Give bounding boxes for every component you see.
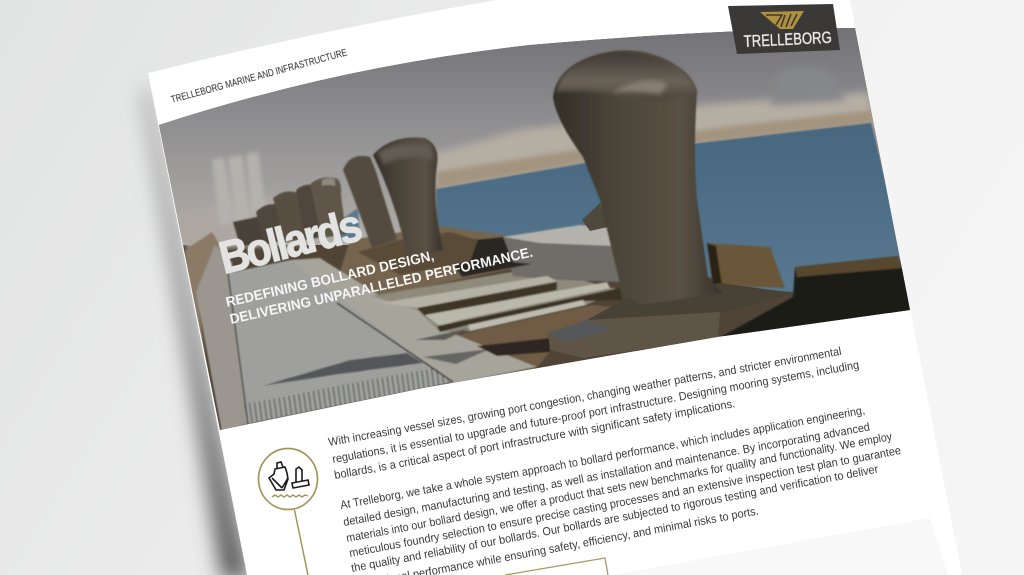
grated deck bbox=[228, 259, 432, 404]
right foreground block bbox=[720, 258, 910, 336]
bollard A bbox=[373, 137, 443, 258]
brochure page bbox=[148, 0, 962, 575]
bollard A base bbox=[358, 232, 478, 275]
body text: meticulous foundry selection to ensure precise casting processes and an extensive inspection test plan to guarantee bbox=[348, 444, 902, 560]
deck shadows bbox=[262, 353, 423, 386]
body text: the quality and reliability of our bollards. Our bollards are subjected to rigorous testing and verification to deliver bbox=[350, 463, 879, 575]
callout box bbox=[505, 558, 608, 575]
deck left rail bbox=[185, 232, 220, 432]
timber deck under steps bbox=[458, 304, 611, 367]
body text: detailed design, manufacturing and testing, as well as installation and maintenance. By incorporating advanced bbox=[342, 421, 871, 529]
body text: At Trelleborg, we take a whole system approach to bollard performance, which includes application engineering, bbox=[339, 404, 866, 512]
concrete strip bbox=[196, 245, 250, 432]
large bollard spur bbox=[582, 203, 608, 231]
subtitle: REDEFINING BOLLARD DESIGN, bbox=[224, 247, 435, 310]
shore bank bbox=[437, 110, 875, 188]
large bollard bbox=[553, 50, 722, 305]
logo badge bbox=[728, 4, 840, 54]
dark recess bbox=[450, 237, 532, 277]
logo wordmark: TRELLEBORG bbox=[743, 28, 832, 51]
sky bbox=[150, 20, 920, 245]
photo base bbox=[150, 20, 920, 440]
distant city bbox=[770, 66, 846, 105]
distant bollards bbox=[233, 177, 346, 246]
walkway joint bbox=[337, 303, 453, 382]
concrete block bbox=[503, 238, 623, 282]
title: Bollards bbox=[214, 199, 366, 284]
body text: regulations, it is essential to upgrade and future-proof port infrastructure. Designing mooring systems, including bbox=[331, 358, 860, 466]
body text: With increasing vessel sizes, growing port congestion, changing weather patterns, and stricter environmental bbox=[327, 345, 842, 449]
body text: materials into our bollard design, we offer a product that sets new benchmarks for quality and functionality. We employ bbox=[345, 430, 893, 545]
icon: ships in roundel bbox=[258, 448, 318, 575]
far shore bbox=[430, 92, 875, 188]
subtitle: DELIVERING UNPARALLELED PERFORMANCE. bbox=[228, 244, 534, 327]
logo emblem bbox=[760, 11, 804, 29]
page shadow bbox=[142, 85, 250, 575]
hero photo bbox=[150, 20, 920, 440]
water bbox=[436, 123, 915, 300]
timber block bbox=[707, 243, 785, 288]
side panel bbox=[612, 518, 948, 575]
hazy left towers bbox=[177, 152, 300, 251]
concrete plate under steps bbox=[372, 268, 620, 332]
timber far deck bbox=[340, 226, 530, 296]
body text bbox=[327, 345, 902, 575]
concrete walkway bbox=[290, 258, 537, 384]
step plates bbox=[380, 276, 557, 308]
large bollard base bbox=[587, 283, 793, 320]
body text: bollards, is a critical aspect of port infrastructure with significant safety implications. bbox=[333, 397, 736, 482]
header label: TRELLEBORG MARINE AND INFRASTRUCTURE bbox=[170, 48, 348, 106]
bollard B bbox=[343, 156, 397, 248]
